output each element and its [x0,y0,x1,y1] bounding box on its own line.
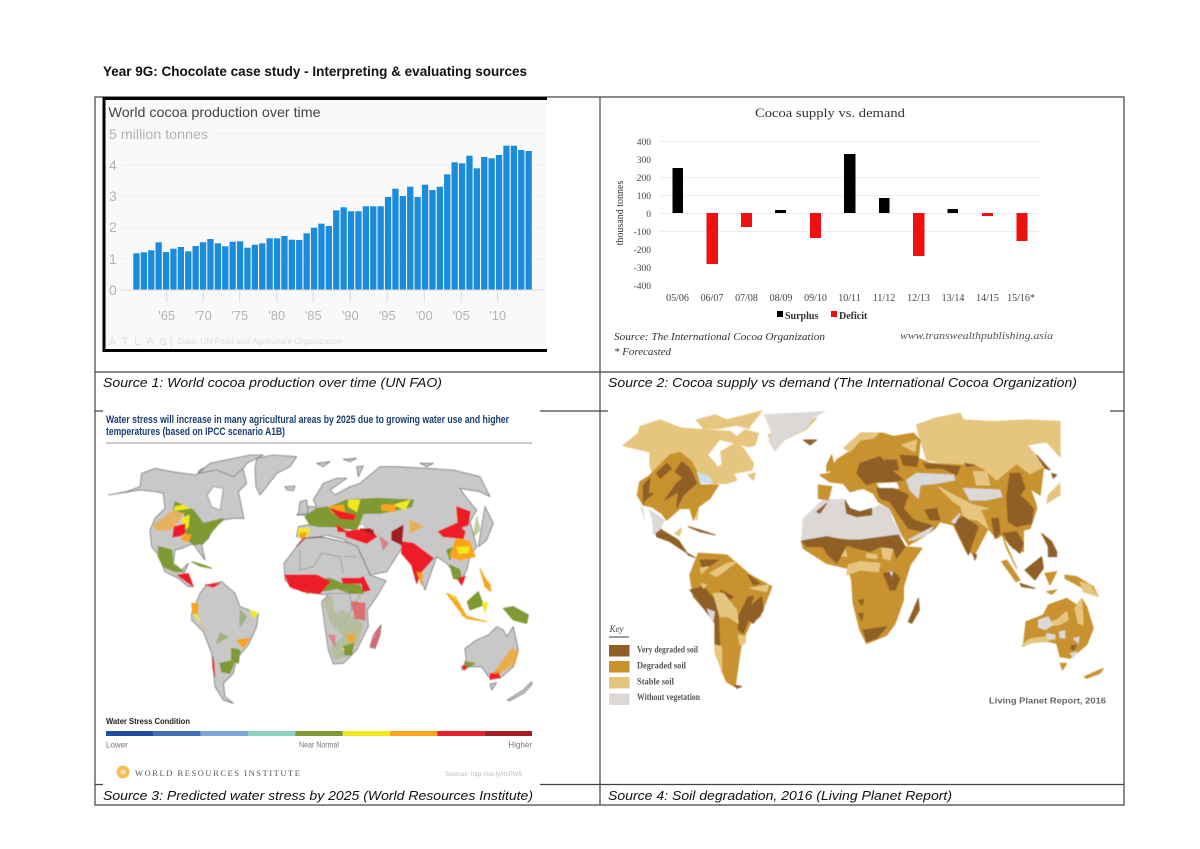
source note: www.transwealthpublishing.asia [900,331,1053,342]
key very degraded: Very degraded soil [637,646,698,656]
unit label: 5 million tonnes [109,127,208,142]
gridlines [121,134,544,259]
source note: * Forecasted [614,347,672,358]
caption: source 4: Source 4: Soil degradation, 2016 (Living Planet Report) [608,788,952,803]
y axis numbers [109,157,117,298]
red regions [173,524,220,677]
bare land [1038,617,1079,658]
x axis labels: 15/16* [1007,293,1035,304]
y axis numbers: 400 [637,138,651,148]
x axis labels: '95 [379,308,396,323]
x axis labels [666,293,1035,304]
stable soil [623,411,817,536]
table grid [95,97,1124,805]
y axis numbers: 3 [109,188,117,204]
mexico bare land [640,505,665,535]
title: Year 9G: Chocolate case study - Interpreting & evaluating sources [103,63,527,79]
x axis labels: 06/07 [701,293,723,304]
red regions [297,507,470,585]
x axis labels: 07/08 [735,293,758,304]
yellow regions [174,505,258,623]
legend title: Water Stress Condition [106,717,190,726]
y axis numbers: 4 [109,157,117,173]
other degraded islands and peninsulas [818,455,1098,612]
legend labels: Lower [106,740,128,750]
x axis labels: 09/10 [804,293,827,304]
atacama bare land [707,608,715,623]
y axis numbers: -200 [634,246,651,256]
black sea [347,525,365,533]
map heading: temperatures (based on IPCC scenario A1B) [106,426,285,438]
y axis numbers: 300 [637,156,651,166]
y axis numbers [634,138,651,292]
country borders [300,550,360,623]
map: Americas [108,455,297,703]
degraded soil [637,452,718,520]
panel: source 3 water stress map [106,414,532,778]
y axis numbers: 2 [109,219,117,235]
y axis numbers: 0 [109,282,117,298]
x axis labels: '70 [195,308,212,323]
gridlines [660,142,1040,232]
x axis labels: 12/13 [907,293,930,304]
map: North America and Greenland [623,411,826,558]
legend labels: Higher [508,740,532,750]
land [108,455,297,703]
yellow regions [298,500,463,537]
hudson bay [207,487,223,510]
key without vegetation: Without vegetation [637,693,701,703]
y axis numbers: 0 [646,210,651,220]
south america degraded [690,553,772,687]
caption: source 3: Source 3: Predicted water stress by 2025 (World Resources Institute) [103,788,533,803]
x axis labels: 08/09 [770,293,792,304]
legend: key [608,624,701,705]
very degraded soil [643,440,817,558]
y axis numbers: -400 [634,282,651,292]
atlas credit [109,336,342,348]
land [297,458,493,590]
orange regions [300,505,475,560]
x axis labels: '90 [342,308,359,323]
x axis labels: '80 [268,308,285,323]
legend: Deficit [839,311,868,322]
chart heading: Cocoa supply vs. demand [755,106,906,120]
land [284,537,532,701]
y axis numbers: -300 [634,264,651,274]
map heading [106,414,510,438]
degraded land [1023,598,1103,678]
stable patches [832,433,1098,597]
x axis labels [158,308,506,323]
map credit: Living Planet Report, 2016 [989,696,1106,706]
chart black frame [104,98,547,350]
map: Africa, south-east Asia and Australia [284,537,532,701]
atlas credit: Data: UN Food and Agriculture Organization [178,337,342,346]
green regions [300,578,528,668]
pale green belt [323,595,363,660]
key stable: Stable soil [637,678,674,688]
dark red regions [360,525,403,545]
chart heading: World cocoa production over time [108,104,321,120]
legend [777,311,868,322]
africa degraded [802,535,922,643]
caspian and lake tint [889,477,930,577]
map source note: Sources: http://ow.ly/rtzPW5 [445,772,523,778]
map heading: Water stress will increase in many agricultural areas by 2025 due to growing water use and higher [106,414,510,426]
x axis labels: '05 [453,308,470,323]
yellow regions [342,593,488,651]
y axis numbers: 1 [109,251,117,267]
bare regions [907,473,1002,540]
y axis title: thousand tonnes [615,181,626,245]
key degraded: Degraded soil [637,662,686,672]
legend: Surplus [785,311,818,322]
WRI wordmark: WORLD RESOURCES INSTITUTE [135,768,300,778]
orange regions [153,512,250,648]
red regions [285,575,500,679]
south america stable [700,562,768,670]
mediterranean and black sea [832,482,899,512]
heading rule [106,442,532,444]
south china yellow and india tip [417,547,470,587]
map: Africa, Europe and Asia [802,413,1098,643]
deficit bars [706,213,1028,264]
legend labels [106,740,532,750]
x axis labels: '65 [158,308,175,323]
y axis numbers: 100 [637,192,651,202]
green regions [158,502,247,673]
very degraded [1071,645,1077,650]
eurasia degraded [820,433,1043,553]
stable soil [1022,598,1083,646]
very degraded regions [802,455,1057,642]
legend colour bar [106,731,532,736]
x axis labels: '75 [231,308,248,323]
y axis numbers: 200 [637,174,651,184]
green regions [305,498,480,580]
x axis labels: '10 [489,308,506,323]
russia stable [917,413,1060,482]
greenland bare ice [764,411,826,452]
icon: WRI logo [116,766,130,778]
hudson bay [708,440,733,467]
map: Australia and New Zealand [1022,598,1103,678]
south america very degraded [690,560,763,688]
x axis labels: 13/14 [942,293,964,304]
panel: source 4 soil map [608,411,1106,706]
x axis labels: 05/06 [666,293,689,304]
x axis labels: '00 [416,308,433,323]
x axis line and ticks [121,290,544,302]
map: South America and southern Africa [690,553,772,688]
sahara [802,498,903,540]
x axis labels: '85 [305,308,322,323]
panel: source 2 bar chart [614,106,1053,358]
source note [614,331,1053,358]
chart background [103,98,547,351]
source note: Source: The International Cocoa Organization [614,332,825,343]
y axis numbers: -100 [634,228,651,238]
atlas credit: ATLAS [109,336,167,348]
x axis labels: 11/12 [873,293,895,304]
caption: source 2: Source 2: Cocoa supply vs demand (The International Cocoa Organization) [608,375,1077,390]
key rule [609,636,629,638]
orange regions [347,568,518,673]
great lakes [697,472,713,483]
panel: source 1 bar chart [103,98,547,351]
map: Europe and Asia [297,458,493,590]
caption: source 1: Source 1: World cocoa production over time (UN FAO) [103,375,442,390]
x axis labels: 10/11 [838,293,861,304]
legend labels: Near Normal [299,740,339,750]
x axis labels: 14/15 [976,293,999,304]
bars [133,146,532,290]
key heading: Key [608,624,624,634]
surplus bars [672,154,958,213]
